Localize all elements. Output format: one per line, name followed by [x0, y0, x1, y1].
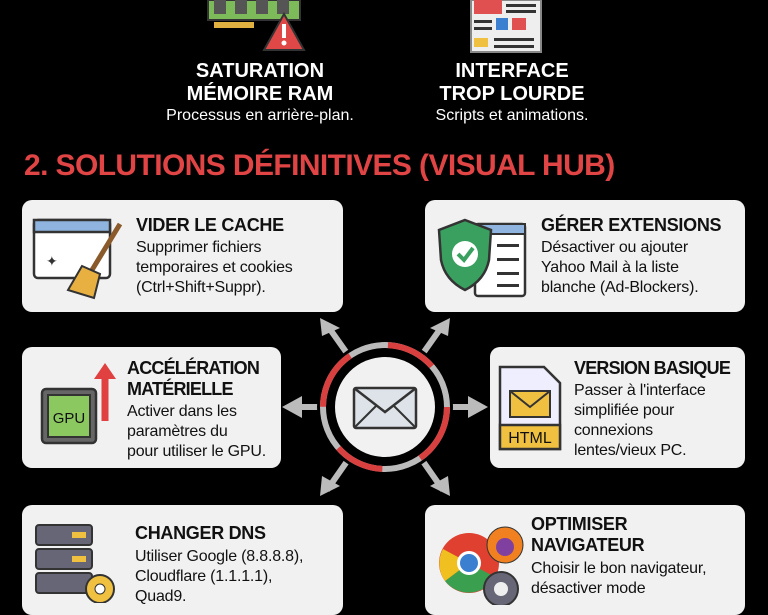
icon: browsers gear [439, 526, 524, 605]
card: gérer extensions: Désactiver ou ajouter [541, 239, 688, 256]
card: accélération matérielle: MATÉRIELLE [127, 379, 233, 399]
card: optimiser navigateur: Choisir le bon navigateur, [531, 560, 706, 577]
card: version basique: connexions [574, 422, 653, 439]
card: accélération matérielle: Activer dans les [127, 403, 237, 420]
cause: interface: INTERFACE [455, 60, 569, 82]
cause: RAM: MÉMOIRE RAM [187, 83, 333, 105]
card: changer DNS: Utiliser Google (8.8.8.8), [135, 548, 303, 565]
cause: interface: TROP LOURDE [439, 83, 585, 105]
cause: RAM [166, 60, 354, 124]
card: changer DNS: Quad9. [135, 588, 186, 605]
icon: servers gear [35, 524, 115, 603]
card: version basique: Passer à l'interface [574, 382, 706, 399]
card: vider le cache [22, 200, 343, 312]
icon: shield list [438, 218, 526, 298]
icon: GPU chip: GPU [53, 410, 85, 427]
icon: heavy interface [470, 0, 542, 53]
icon: browser broom [32, 218, 122, 300]
card: accélération matérielle [22, 347, 281, 468]
card: vider le cache: (Ctrl+Shift+Suppr). [136, 279, 266, 296]
icon: browser broom: ✦ [46, 253, 58, 269]
card: changer DNS: CHANGER DNS [135, 523, 266, 543]
card: gérer extensions: Yahoo Mail à la liste [541, 259, 679, 276]
card: vider le cache: temporaires et cookies [136, 259, 293, 276]
icon: GPU chip [40, 363, 116, 444]
card: version basique: simplifiée pour [574, 402, 674, 419]
card: vider le cache: Supprimer fichiers [136, 239, 261, 256]
cause: RAM: SATURATION [196, 60, 324, 82]
cause: interface: Scripts et animations. [436, 107, 588, 124]
hub: envelope with arrows [282, 318, 488, 496]
card: accélération matérielle: paramètres du [127, 423, 228, 440]
card: version basique: VERSION BASIQUE [574, 358, 730, 378]
card: version basique [490, 347, 745, 468]
card: gérer extensions: blanche (Ad-Blockers). [541, 279, 698, 296]
cause: RAM: Processus en arrière-plan. [166, 107, 354, 124]
section heading: 2. SOLUTIONS DÉFINITIVES (VISUAL HUB) [24, 149, 615, 182]
card: optimiser navigateur [425, 505, 745, 615]
icon: RAM with warning [207, 0, 306, 51]
card: gérer extensions [425, 200, 745, 312]
card: changer DNS [22, 505, 343, 615]
card: accélération matérielle: ACCÉLÉRATION [127, 358, 259, 378]
icon: HTML file [498, 366, 562, 450]
cause: interface [436, 60, 588, 124]
card: optimiser navigateur: désactiver mode [531, 580, 645, 597]
card: gérer extensions: GÉRER EXTENSIONS [541, 215, 721, 235]
card: changer DNS: Cloudflare (1.1.1.1), [135, 568, 272, 585]
icon: HTML file: HTML [508, 430, 552, 447]
card: version basique: lentes/vieux PC. [574, 442, 686, 459]
card: vider le cache: VIDER LE CACHE [136, 215, 284, 235]
card: optimiser navigateur: NAVIGATEUR [531, 535, 644, 555]
card: optimiser navigateur: OPTIMISER [531, 514, 627, 534]
card: accélération matérielle: pour utiliser le GPU. [127, 443, 266, 460]
